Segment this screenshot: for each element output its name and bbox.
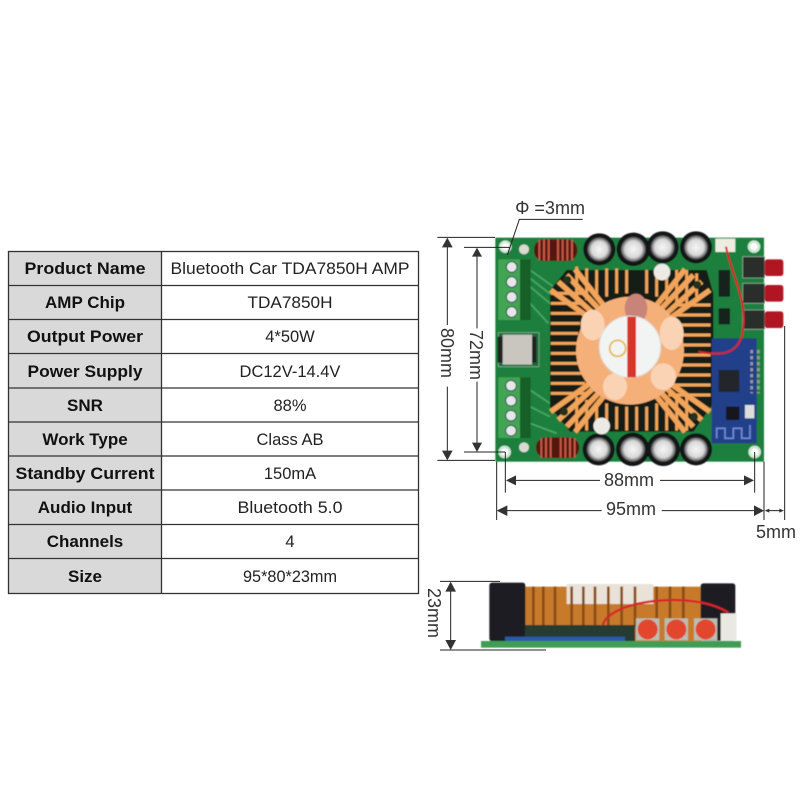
test posts xyxy=(519,244,529,452)
row: size: 95*80*23mm xyxy=(243,568,337,586)
row: standby current xyxy=(16,464,316,483)
row: snr xyxy=(67,396,307,415)
row: channels xyxy=(47,532,295,551)
row: product name xyxy=(24,259,410,278)
label: 23mm: 23mm xyxy=(424,588,444,638)
side red buttons xyxy=(636,618,717,640)
row: output power: 4*50W xyxy=(265,328,315,346)
side wire xyxy=(603,600,728,625)
label: 5mm: 5mm xyxy=(756,522,796,542)
small connector and ICs xyxy=(715,239,735,324)
label: 88mm: 88mm xyxy=(604,470,654,490)
power chip xyxy=(498,333,539,367)
label: 80mm: 80mm xyxy=(437,328,457,378)
row: work type: Work Type xyxy=(42,430,128,449)
red terminals xyxy=(743,257,783,329)
row: channels: Channels xyxy=(47,532,123,551)
row: power supply xyxy=(28,362,340,381)
row: work type: Class AB xyxy=(257,431,323,449)
dimension lines and arrows xyxy=(437,219,785,520)
board edge xyxy=(481,641,741,648)
inductors xyxy=(534,239,579,458)
row: audio input: Bluetooth 5.0 xyxy=(238,499,342,517)
row: amp chip: TDA7850H xyxy=(248,294,332,312)
row: output power: Output Power xyxy=(27,327,143,346)
terminal blocks xyxy=(498,259,531,438)
row: amp chip: AMP Chip xyxy=(45,293,125,312)
side circuit parts xyxy=(525,625,635,642)
amplifier board top view xyxy=(495,231,783,466)
row: channels: 4 xyxy=(285,533,295,551)
red and black wire xyxy=(698,247,744,354)
row: amp chip xyxy=(45,293,332,312)
bluetooth module xyxy=(712,338,758,443)
row: product name: Product Name xyxy=(24,259,146,278)
amplifier board side view xyxy=(481,583,741,648)
mounting holes xyxy=(500,242,760,457)
row: audio input xyxy=(38,498,342,517)
row: standby current: Standby Current xyxy=(16,464,155,483)
side capacitors xyxy=(489,583,735,641)
row: work type xyxy=(42,430,323,449)
row: audio input: Audio Input xyxy=(38,498,133,517)
side connector xyxy=(721,613,737,641)
row: power supply: Power Supply xyxy=(28,362,143,381)
row: output power xyxy=(27,327,315,346)
heatsink xyxy=(550,264,713,434)
row: standby current: 150mA xyxy=(264,465,316,483)
height dimension xyxy=(440,581,546,650)
label: 95mm: 95mm xyxy=(606,499,656,519)
capacitors xyxy=(583,231,712,466)
label: 72mm: 72mm xyxy=(466,330,486,380)
row: snr: 88% xyxy=(273,397,307,415)
row: size: Size xyxy=(68,567,102,586)
spec table xyxy=(8,251,419,594)
row: size xyxy=(68,567,337,586)
row: snr: SNR xyxy=(67,396,103,415)
row: product name: Bluetooth Car TDA7850H AMP xyxy=(170,260,410,278)
label: hole diameter: Φ =3mm xyxy=(515,198,585,218)
row: power supply: DC12V-14.4V xyxy=(240,363,340,381)
